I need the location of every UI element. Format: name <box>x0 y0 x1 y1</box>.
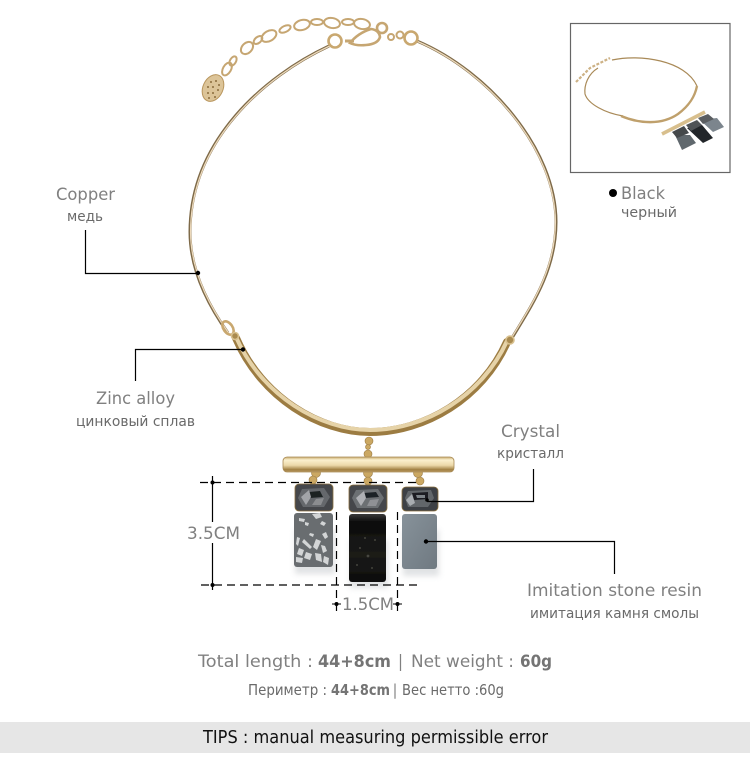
inset necklace <box>576 58 724 150</box>
charm <box>198 71 228 105</box>
specs: russian: 44+8cm <box>331 681 390 699</box>
colour label: black: черный <box>621 205 677 221</box>
specs: english: Net weight : <box>411 652 514 672</box>
chain extender <box>220 17 404 77</box>
colour label: black: Black <box>621 184 665 204</box>
dimension: width 1.5CM: 1.5CM <box>342 595 394 615</box>
callout: copper: Copper <box>56 185 115 205</box>
pendant connector <box>364 437 373 458</box>
callout line: stone resin <box>426 542 614 574</box>
specs: english: | <box>398 652 403 672</box>
specs: english <box>197 652 552 672</box>
necklace <box>190 17 556 588</box>
inset: colour option photo <box>570 24 730 172</box>
dimension: width 1.5CM <box>332 512 402 615</box>
specs: english: 60g <box>520 652 552 672</box>
callout: imitation stone resin: Imitation stone resin <box>527 581 702 601</box>
drop links <box>309 468 424 485</box>
callout line: crystal <box>427 469 534 502</box>
stone shadows <box>295 530 439 588</box>
callout: crystal <box>425 422 564 502</box>
specs: english: 44+8cm <box>318 652 391 672</box>
callout: imitation stone resin: имитация камня смолы <box>530 606 699 622</box>
tips band: TIPS : manual measuring permissible error <box>202 727 549 748</box>
dimension: height 3.5CM: 3.5CM <box>187 524 240 544</box>
colour label: black <box>609 184 677 221</box>
dimension: height 3.5CM <box>187 476 421 590</box>
specs: russian <box>248 681 504 699</box>
callout: crystal: кристалл <box>497 446 564 462</box>
crystals <box>295 484 438 512</box>
stones <box>294 513 437 582</box>
specs: english: Total length : <box>197 652 313 672</box>
callout: crystal: Crystal <box>501 422 560 442</box>
specs: russian: | <box>393 681 397 699</box>
callout: zinc alloy: цинковый сплав <box>76 414 195 430</box>
collar tube <box>236 338 507 432</box>
callout: zinc alloy <box>76 347 245 430</box>
callout: copper <box>56 185 200 275</box>
callout line: zinc alloy <box>136 350 243 381</box>
specs: russian: Вес нетто :60g <box>402 681 504 699</box>
callout: copper: медь <box>67 209 103 225</box>
wire loops <box>220 32 418 337</box>
gold bar <box>283 457 454 472</box>
callout line: copper <box>86 230 198 274</box>
tube eyelets <box>232 332 514 344</box>
copper wire <box>190 46 329 333</box>
callout: zinc alloy: Zinc alloy <box>96 389 175 409</box>
specs: russian: Периметр : <box>248 681 327 699</box>
tips band <box>0 722 750 753</box>
callout: imitation stone resin <box>424 539 702 622</box>
